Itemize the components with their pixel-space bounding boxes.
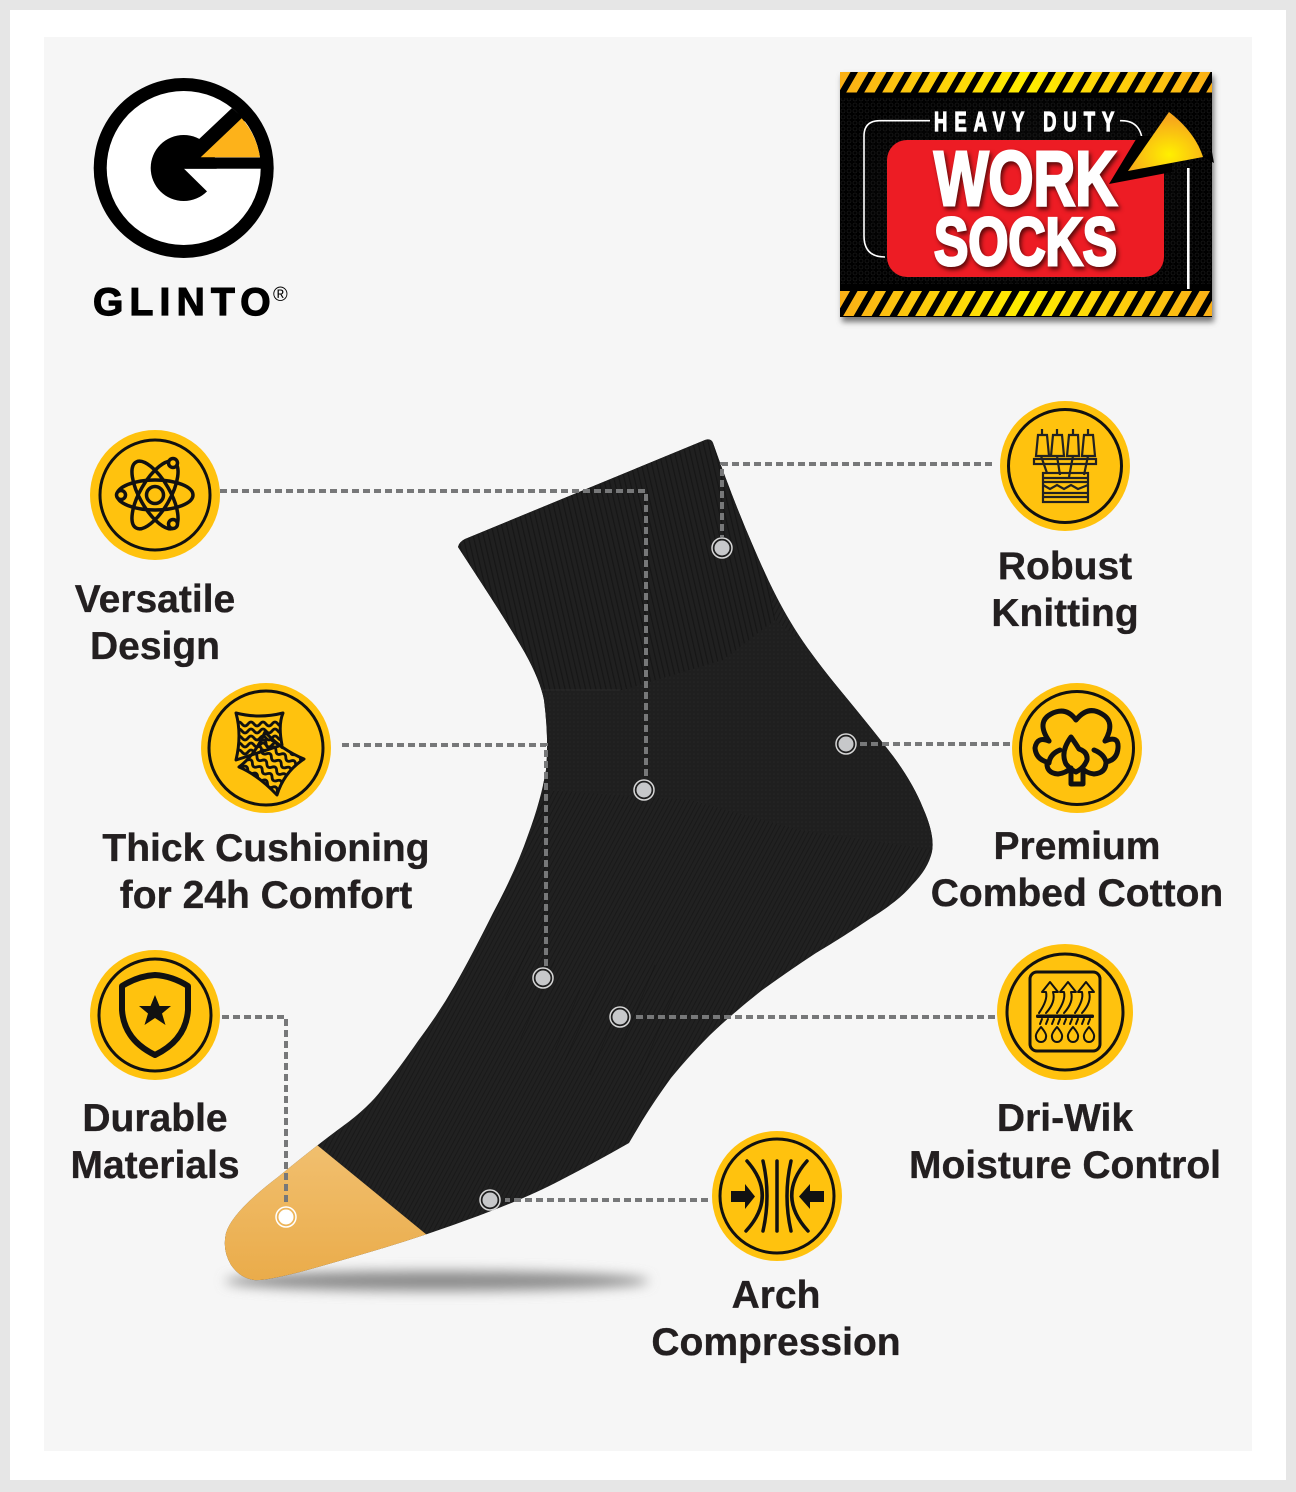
logo: Glinto [93, 78, 288, 324]
label: Compression [651, 1321, 901, 1364]
icon: shield [90, 950, 220, 1080]
icon: cushions [201, 683, 331, 813]
feature: Versatile Design [75, 430, 235, 668]
label: Durable [82, 1097, 228, 1140]
label: Versatile [75, 578, 235, 621]
feature: Robust Knitting [991, 401, 1139, 635]
label: Combed Cotton [931, 872, 1223, 915]
logo wordmark: GLINTO [93, 281, 277, 324]
icon: compression arrows [712, 1131, 842, 1261]
label: Premium [994, 825, 1160, 868]
label: Thick Cushioning [102, 827, 430, 870]
icon: moisture wicking [997, 944, 1133, 1080]
badge title [934, 136, 1117, 280]
logo wordmark: ® [273, 284, 288, 306]
badge title: WORK [934, 136, 1117, 222]
hazard stripes [840, 72, 1212, 316]
sock toe [224, 1146, 426, 1280]
feature: Arch Compression [651, 1131, 901, 1364]
label: Materials [70, 1144, 240, 1187]
label: Moisture Control [909, 1144, 1221, 1187]
label: Knitting [991, 592, 1139, 635]
label: Dri-Wik [997, 1097, 1133, 1140]
marker dots [276, 538, 856, 1227]
icon: atom [90, 430, 220, 560]
badge heading: HEAVY DUTY [934, 107, 1121, 138]
label: Arch [732, 1274, 820, 1317]
label: for 24h Comfort [120, 874, 412, 917]
sock illustration [224, 439, 933, 1280]
badge title: SOCKS [934, 204, 1117, 280]
icon: knitting machine [1000, 401, 1130, 531]
feature: Dri-Wik Moisture Control [909, 944, 1221, 1187]
leader lines [220, 464, 1010, 1205]
feature: Premium Combed Cotton [931, 683, 1223, 915]
badge: Heavy Duty Work Socks [840, 72, 1214, 322]
icon: Glinto G mark [94, 78, 274, 258]
feature: Thick Cushioning [102, 683, 430, 917]
sock shadow [225, 1271, 649, 1291]
label: Robust [998, 545, 1132, 588]
label: Design [90, 625, 220, 668]
feature: Durable Materials [70, 950, 240, 1187]
icon: cotton boll [1012, 683, 1142, 813]
